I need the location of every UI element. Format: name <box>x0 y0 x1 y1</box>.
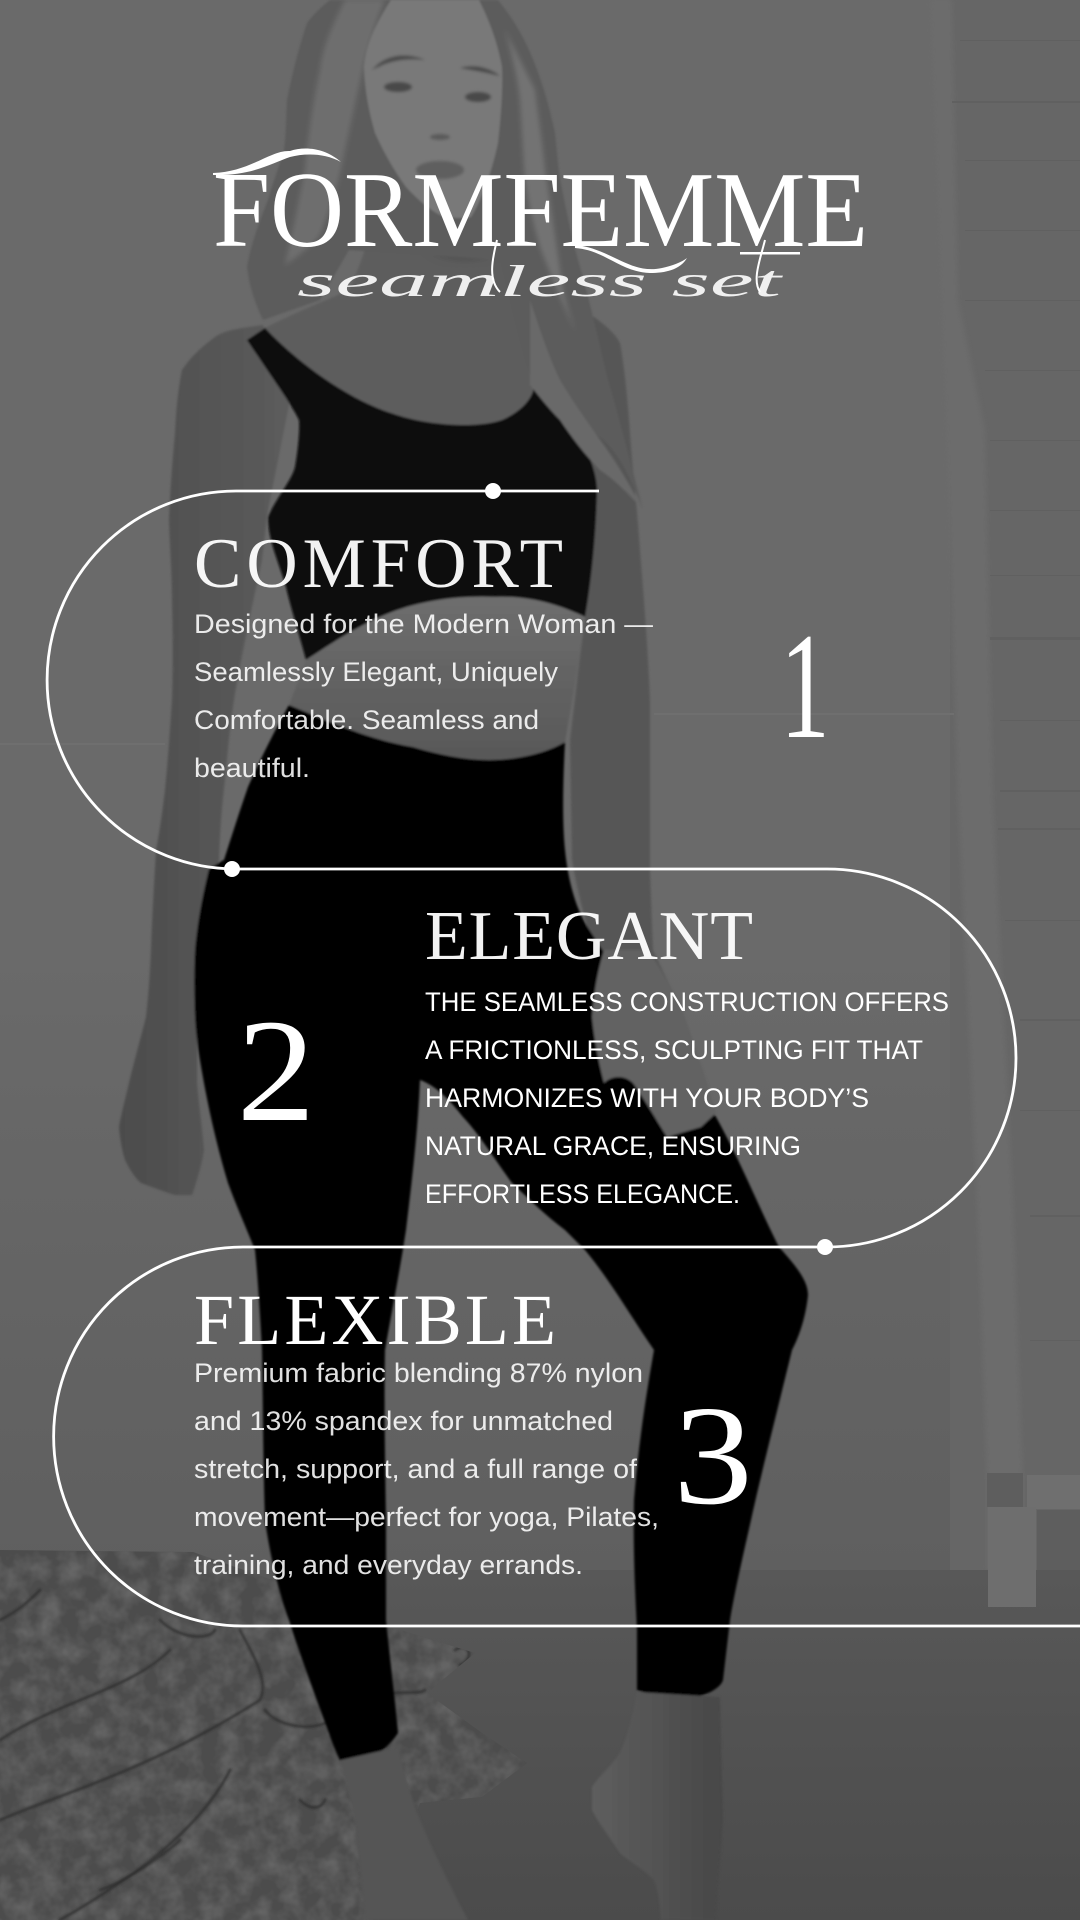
text block: flexible description <box>194 1358 659 1580</box>
panel: flexible <box>194 1280 753 1580</box>
text block: elegant description <box>425 987 949 1209</box>
text block: flexible description: stretch, support, and a full range of <box>194 1454 638 1484</box>
photo: door post foot <box>988 1507 1036 1607</box>
hair front strand <box>530 300 643 510</box>
raised foot <box>592 1692 723 1920</box>
panel: elegant <box>237 898 949 1209</box>
left arm <box>119 325 290 1195</box>
number 2: 2 <box>237 989 315 1152</box>
eyebrows, eyes, nose and lips <box>372 56 500 179</box>
photo: floor <box>0 1570 1080 1920</box>
text block: comfort description: Comfortable. Seamless and <box>194 705 539 735</box>
hand on thigh <box>592 950 716 1137</box>
midriff <box>289 597 585 760</box>
face <box>364 0 502 218</box>
text block: flexible description: movement—perfect for yoga, Pilates, <box>194 1502 659 1532</box>
dot: comfort top <box>485 483 501 499</box>
connecting line: stadium outline linking panels <box>47 483 1080 1626</box>
text block: elegant description: A FRICTIONLESS, SCULPTING FIT THAT <box>425 1035 923 1065</box>
text block: flexible description: and 13% spandex for unmatched <box>194 1406 613 1436</box>
text block: comfort description <box>194 609 653 783</box>
dot: comfort to elegant <box>224 861 240 877</box>
panel: comfort <box>194 525 830 783</box>
chest and neck <box>265 215 560 430</box>
text block: flexible description: Premium fabric blending 87% nylon <box>194 1358 643 1388</box>
script subtitle: seamless set <box>297 257 785 306</box>
right arm and hand <box>560 317 716 1137</box>
wordmark: FORMFEMME <box>213 151 868 270</box>
swashes <box>213 149 800 273</box>
text block: flexible description: training, and everyday errands. <box>194 1550 583 1580</box>
heading: flexible: FLEXIBLE <box>194 1280 556 1360</box>
hair <box>247 0 643 510</box>
number 1: 1 <box>780 602 830 770</box>
text block: elegant description: THE SEAMLESS CONSTRUCTION OFFERS <box>425 987 949 1017</box>
text block: comfort description: Seamlessly Elegant, Uniquely <box>194 657 559 687</box>
heading: elegant: ELEGANT <box>425 898 753 975</box>
text block: comfort description: Designed for the Modern Woman — <box>194 609 653 639</box>
text block: elegant description: NATURAL GRACE, ENSURING <box>425 1131 801 1161</box>
standing ankle and foot <box>341 1747 468 1920</box>
heading: comfort: COMFORT <box>194 525 563 603</box>
dot: elegant to flexible <box>817 1239 833 1255</box>
number 3: 3 <box>673 1377 753 1534</box>
text block: elegant description: HARMONIZES WITH YOUR BODY’S <box>425 1083 869 1113</box>
text block: comfort description: beautiful. <box>194 753 310 783</box>
title: brand logo <box>213 149 868 306</box>
photo: woven rug <box>0 1540 540 1920</box>
photo: model figure <box>119 0 808 1920</box>
text block: elegant description: EFFORTLESS ELEGANCE. <box>425 1179 740 1209</box>
crop top <box>247 328 597 660</box>
leggings <box>194 705 808 1762</box>
script flourishes <box>492 240 765 292</box>
